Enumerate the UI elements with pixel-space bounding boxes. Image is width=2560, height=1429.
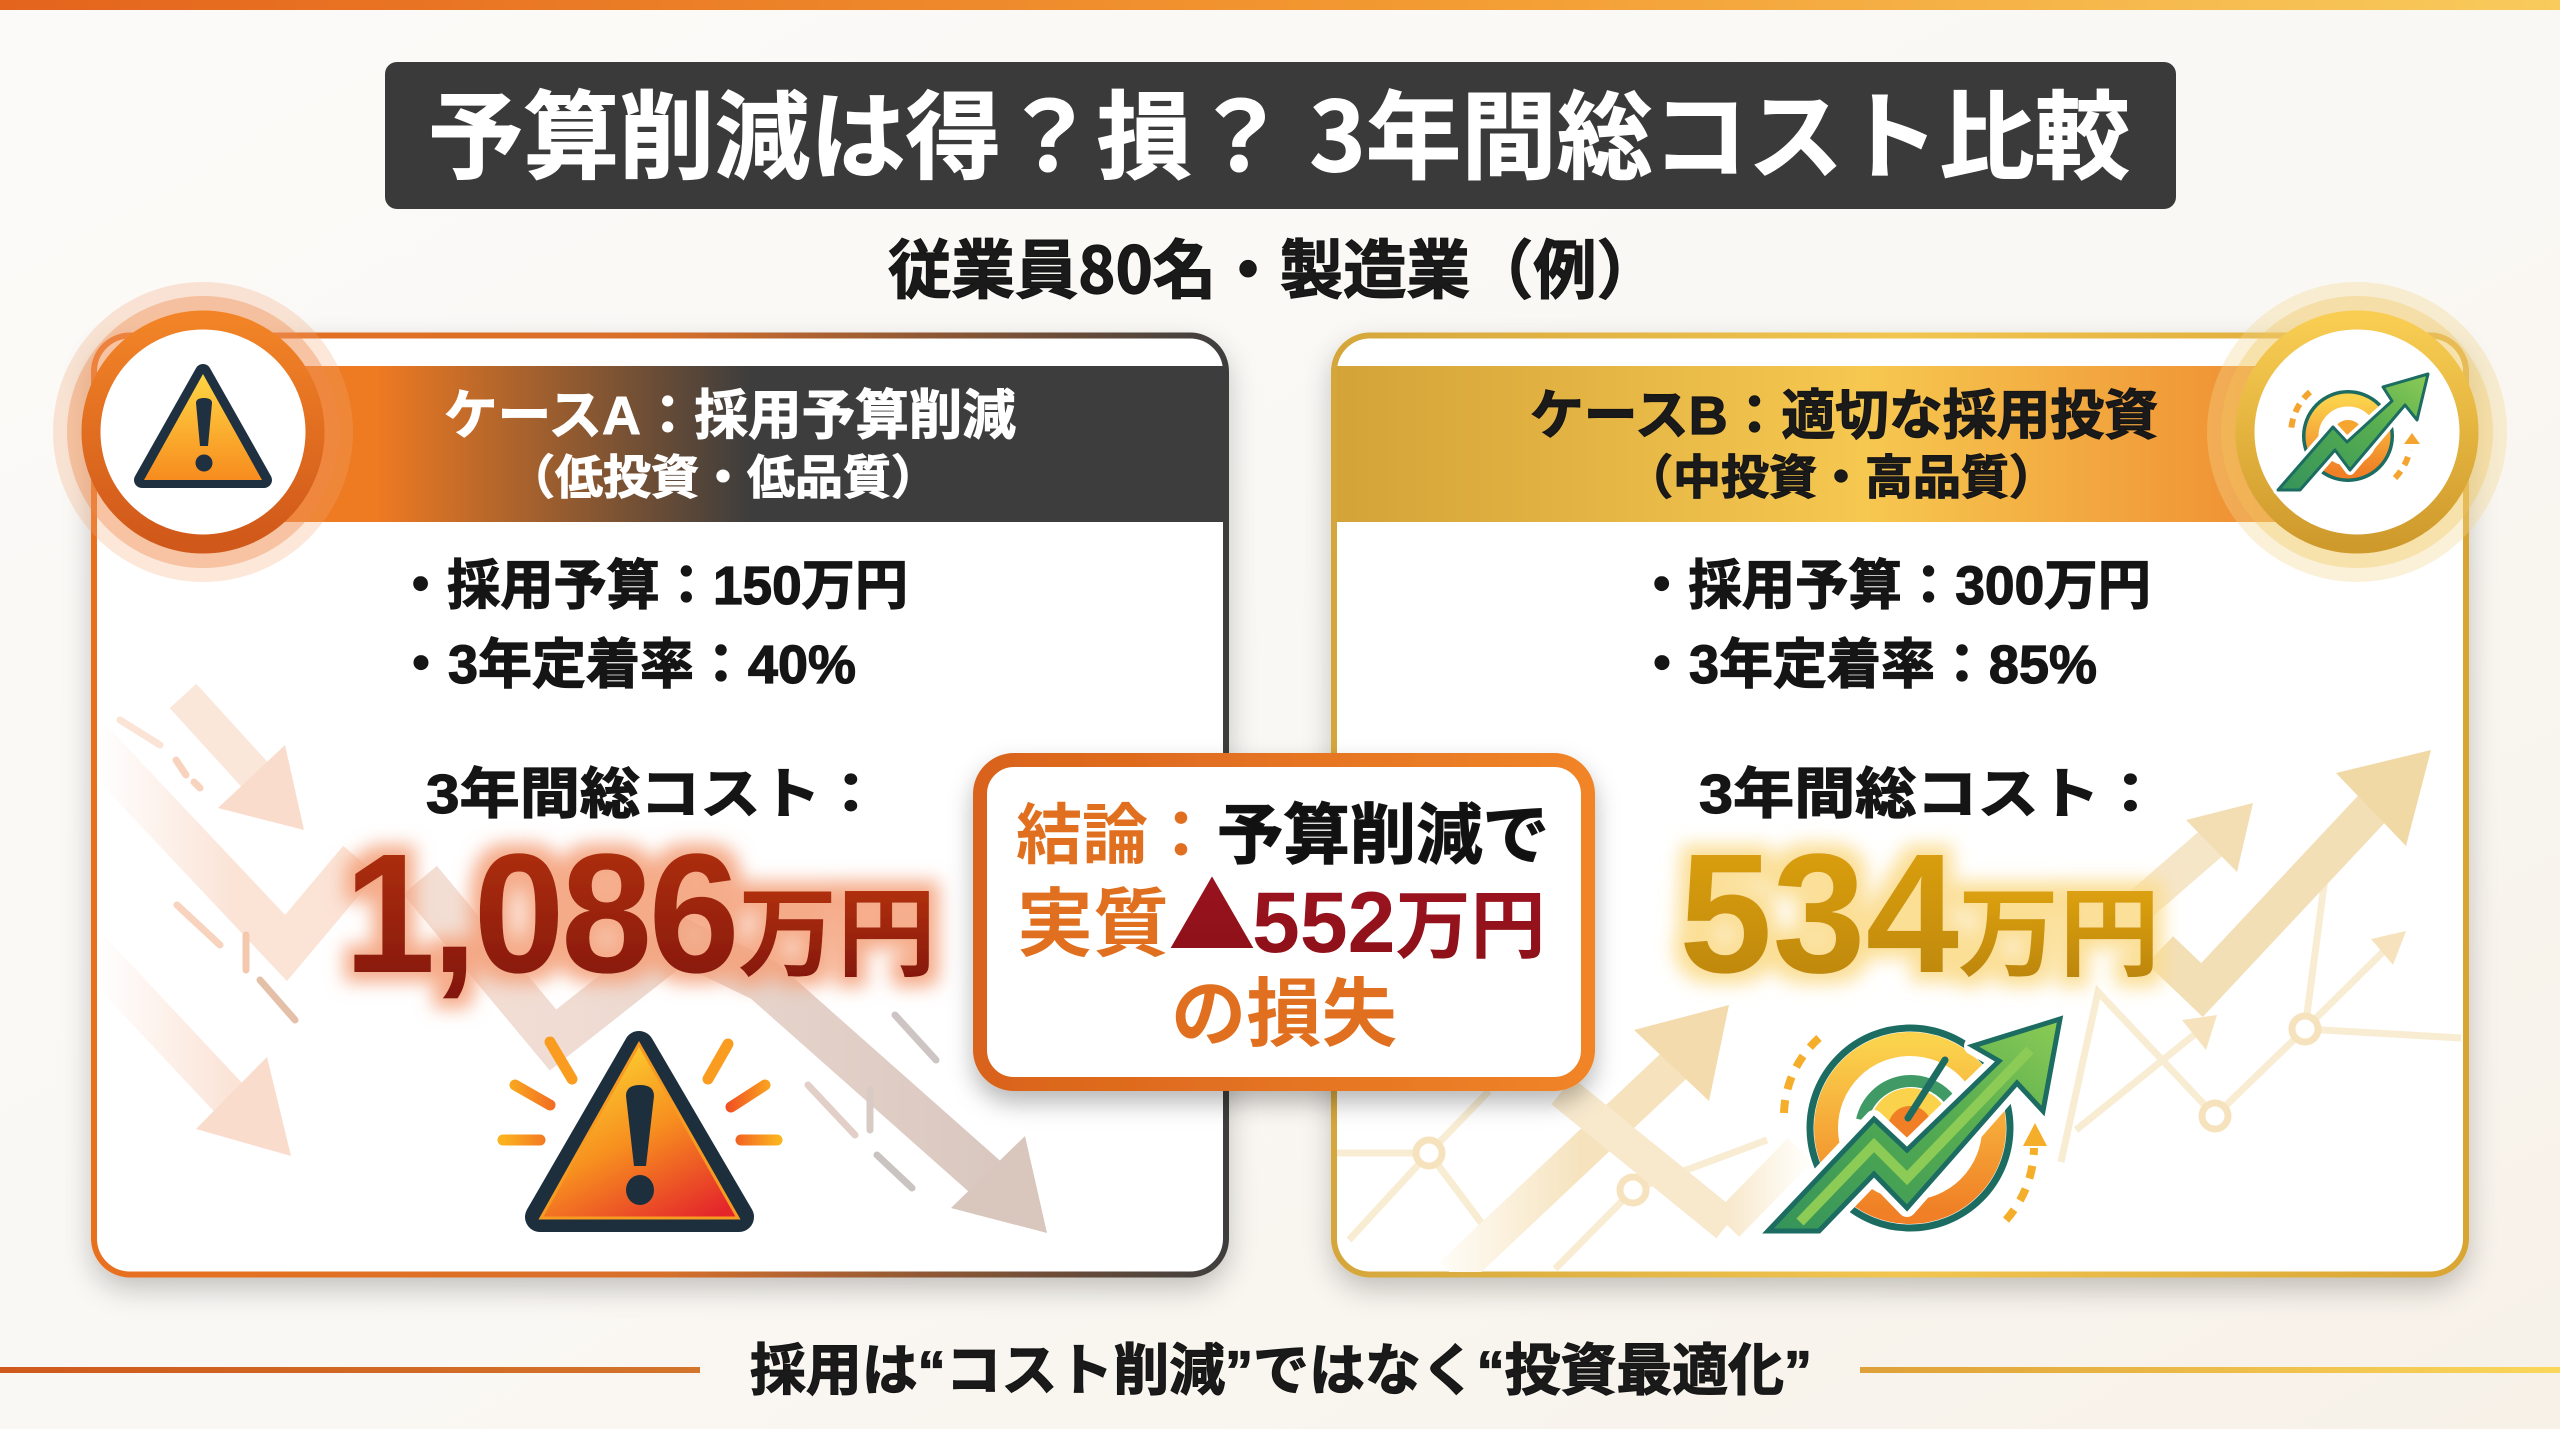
footer left line [0, 1367, 700, 1373]
card B frame [1334, 336, 2466, 1274]
callout line 1: 予算削減で [1217, 798, 1549, 872]
callout line 1 [1016, 798, 1549, 872]
callout line 1: 結論： [1016, 798, 1214, 872]
top accent bar [0, 0, 2560, 10]
bullets B: ・3年定着率：85% [1635, 635, 2097, 695]
callout line 2: 実質 [1017, 882, 1169, 966]
icon: warning badge [53, 282, 353, 582]
cost value B [1679, 819, 2160, 1009]
panel: case A [53, 282, 1226, 1274]
downward arrows background [90, 696, 1047, 1233]
bullets A: ・採用予算：150万円 [394, 556, 908, 616]
cost value A: 万円 [738, 879, 936, 989]
header band A [203, 366, 1226, 522]
subtitle: 従業員80名・製造業（例） [888, 220, 1660, 312]
bullets A [394, 556, 908, 695]
card A frame [94, 336, 1226, 1274]
callout: conclusion [980, 760, 1588, 1084]
footer right line [1860, 1367, 2560, 1373]
header band B [1337, 366, 2357, 522]
header text A: ケースA：採用予算削減 [444, 386, 1016, 446]
callout line 3: の損失 [1171, 972, 1397, 1056]
callout line 2: ▲ [1168, 848, 1256, 975]
header text A [444, 386, 1016, 504]
header text A: （低投資・低品質） [507, 451, 939, 504]
icon: warning triangle [503, 1042, 777, 1218]
cost value B: 534 [1679, 819, 1959, 1009]
callout line 2 [1017, 848, 1546, 975]
header text B: ケースB：適切な採用投資 [1530, 386, 2158, 446]
header text B [1530, 386, 2158, 504]
bullets A: ・3年定着率：40% [394, 635, 856, 695]
upward arrows background [1335, 750, 2461, 1275]
header text B: （中投資・高品質） [1625, 451, 2057, 504]
bullets B [1635, 556, 2151, 695]
icon: growth badge [2207, 282, 2507, 582]
callout line 2: 552万円 [1252, 875, 1546, 971]
footer message: 採用は“コスト削減”ではなく“投資最適化” [750, 1339, 1812, 1402]
icon: growth chart [1768, 1019, 2060, 1231]
bullets B: ・採用予算：300万円 [1635, 556, 2151, 616]
panel: case B [1334, 282, 2507, 1275]
cost value A: 1,086 [344, 819, 736, 1009]
cost value B: 万円 [1958, 879, 2160, 989]
cost label B: 3年間総コスト： [1699, 763, 2161, 825]
title bar: 予算削減は得？損？ 3年間総コスト比較 [428, 60, 2130, 199]
cost value A [344, 819, 936, 1009]
cost label A: 3年間総コスト： [426, 763, 881, 825]
